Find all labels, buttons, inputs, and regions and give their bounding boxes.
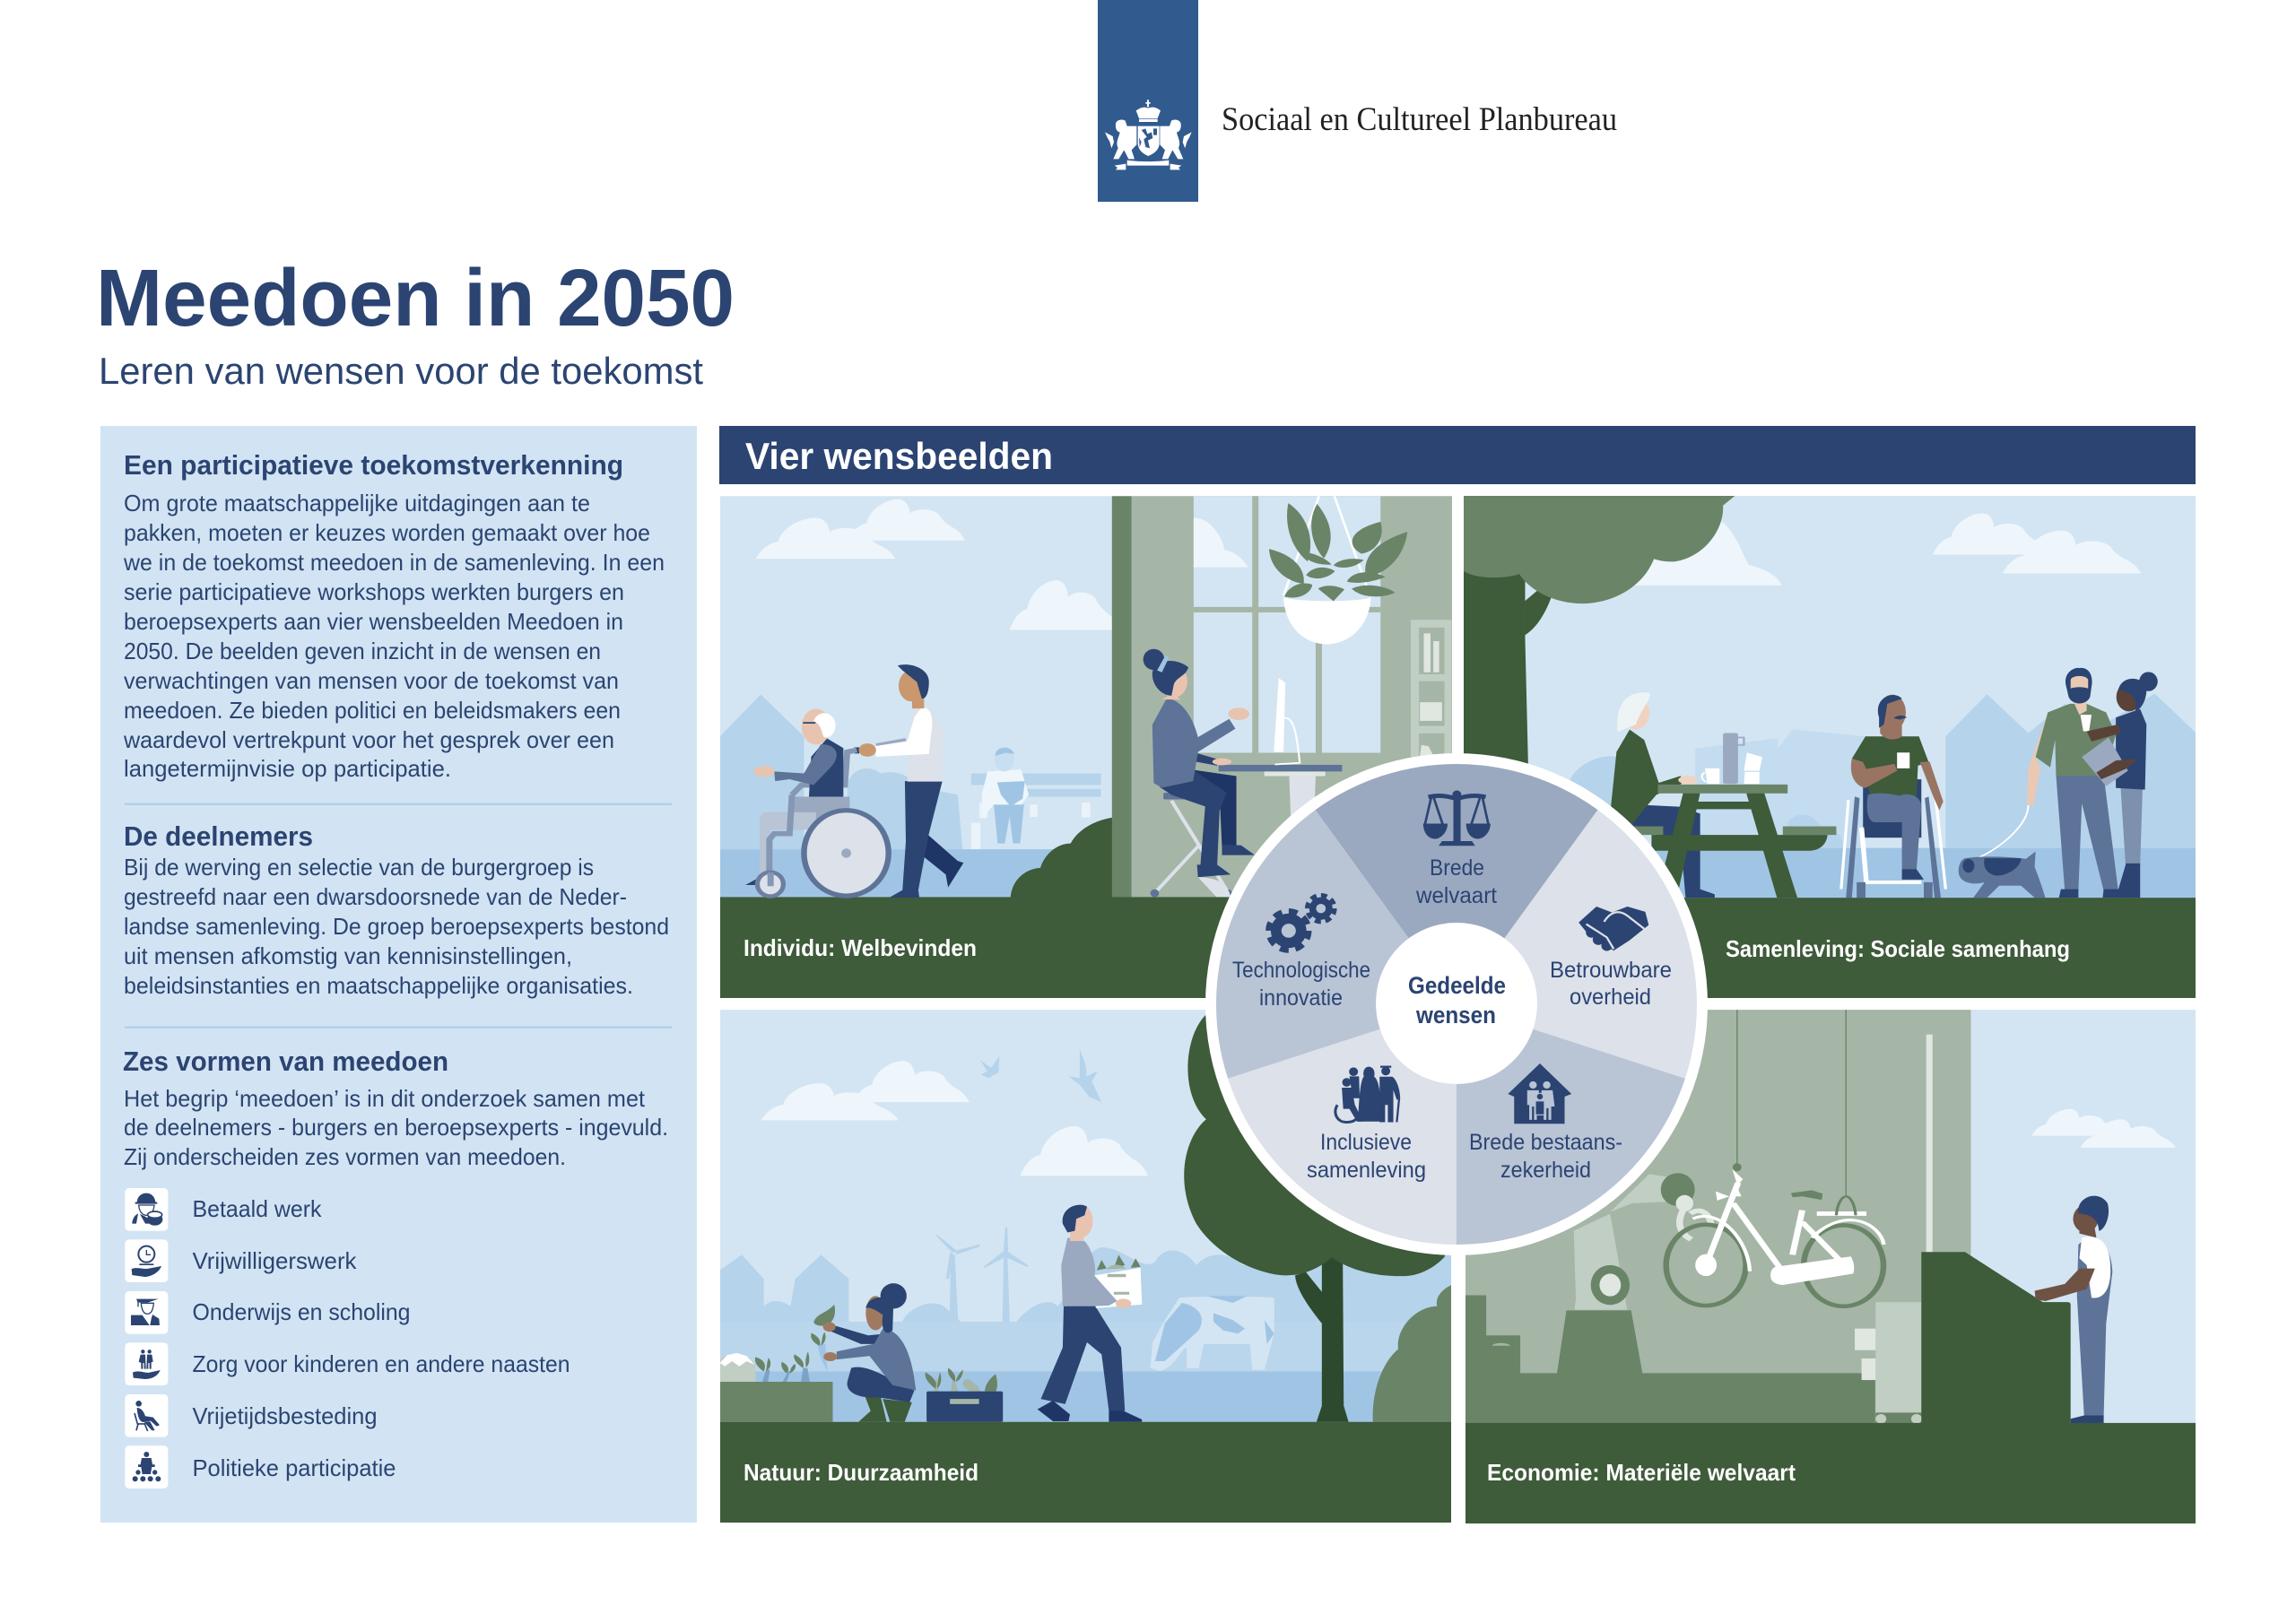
section: zes vormen van meedoen	[123, 1046, 668, 1170]
tree	[1184, 1015, 1446, 1422]
title: Meedoen in 2050	[96, 254, 735, 343]
heading bar: vier wensbeelden: Vier wensbeelden	[745, 435, 1053, 477]
icon: handshake	[1578, 907, 1648, 951]
wheel centre label: wensen	[1415, 1002, 1496, 1028]
panel: individu welbevinden	[718, 496, 1454, 1002]
wind turbines	[935, 1228, 1029, 1322]
section: participatieve toekomstverkenning: meedoen. Ze bieden politici en beleidsmakers een	[124, 697, 621, 724]
icon: house with family	[1508, 1063, 1571, 1124]
dog with leash	[1959, 805, 2046, 898]
section: participatieve toekomstverkenning: Om grote maatschappelijke uitdagingen aan te	[124, 490, 590, 516]
text: brede bestaanszekerheid: zekerheid	[1500, 1158, 1591, 1183]
ground	[718, 1422, 1454, 1525]
section: de deelnemers: uit mensen afkomstig van kennisinstellingen,	[124, 942, 572, 969]
icon: onderwijs en scholing	[125, 1291, 168, 1334]
label: Vrijetijdsbesteding	[192, 1402, 377, 1429]
woman at picnic table	[1610, 692, 1715, 898]
panel: natuur duurzaamheid	[718, 1004, 1476, 1525]
subtitle: Leren van wensen voor de toekomst	[99, 350, 703, 392]
text: technologische innovatie: innovatie	[1259, 985, 1343, 1011]
icon: zorg voor naasten	[125, 1342, 168, 1385]
man in wheelchair	[1841, 695, 1945, 898]
icon: betaald werk	[125, 1188, 168, 1231]
section: de deelnemers: beleidsinstanties en maatschappelijke organisaties.	[124, 972, 633, 999]
text: inclusieve samenleving: Inclusieve	[1320, 1130, 1412, 1155]
ground	[1684, 898, 2196, 998]
label: Politieke participatie	[192, 1454, 396, 1481]
picnic table	[1632, 733, 1836, 898]
text: technologische innovatie: Technologische	[1232, 958, 1370, 983]
section: participatieve toekomstverkenning: waardevol vertrekpunt voor het gesprek over een	[123, 726, 614, 753]
woman at desk	[1144, 649, 1342, 898]
building	[1112, 496, 1454, 898]
section: zes vormen van meedoen: Zes vormen van meedoen	[123, 1046, 448, 1077]
bush	[1373, 1284, 1454, 1422]
section: participatieve toekomstverkenning: langetermijnvisie op participatie.	[124, 755, 451, 782]
ground	[720, 897, 1230, 998]
bench with person	[971, 748, 1100, 849]
section: de deelnemers: De deelnemers	[124, 820, 313, 852]
caregiver and wheelchair	[745, 664, 963, 898]
section: participatieve toekomstverkenning: beroepsexperts aan vier wensbeelden Meedoen in	[124, 608, 623, 635]
cow	[1150, 1296, 1274, 1371]
section: de deelnemers: landse samenleving. De groep beroepsexperts bestond	[124, 913, 669, 940]
text: inclusieve samenleving: samenleving	[1307, 1158, 1426, 1183]
bicycle	[1666, 1163, 1884, 1306]
walking man with bag	[1038, 1204, 1142, 1422]
panel: samenleving sociale samenhang	[1462, 494, 2198, 1004]
section: participatieve toekomstverkenning: serie participatieve workshops werkten burgers en	[124, 578, 624, 605]
icon: vrijwilligerswerk	[125, 1239, 168, 1282]
control console	[1921, 1252, 2071, 1424]
icon: gears	[1268, 895, 1335, 950]
section: participatieve toekomstverkenning: we in de toekomst meedoen in de samenleving. In een	[123, 549, 665, 576]
conveyor and cabinet	[1465, 1296, 1922, 1424]
label: individu: Individu: Welbevinden	[744, 934, 977, 961]
panel: economie materiele welvaart	[1462, 1010, 2199, 1526]
text: brede bestaanszekerheid: Brede bestaans-	[1469, 1130, 1622, 1155]
text: betrouwbare overheid	[1550, 958, 1672, 1010]
wheel centre label: Gedeelde	[1408, 972, 1506, 999]
section: zes vormen van meedoen: de deelnemers - burgers en beroepsexperts - ingevuld.	[124, 1114, 668, 1141]
label: economie: Economie: Materiële welvaart	[1487, 1459, 1796, 1486]
illustration: individu scene	[718, 496, 1454, 1002]
illustration: natuur scene	[718, 1004, 1476, 1525]
icon: vrijetijdsbesteding	[125, 1394, 168, 1437]
ground	[1462, 1423, 2198, 1526]
text: technologische innovatie	[1232, 958, 1370, 1011]
section: zes vormen van meedoen: Het begrip ‘meedoen’ is in dit onderzoek samen met	[124, 1085, 646, 1112]
illustration: economie scene	[1462, 1010, 2199, 1526]
icon: politieke participatie	[125, 1445, 168, 1488]
illustration: samenleving scene	[1462, 494, 2198, 1004]
robot arm	[1557, 1173, 1711, 1375]
icon: scales	[1423, 790, 1491, 846]
section: participatieve toekomstverkenning	[123, 449, 665, 782]
worker	[2035, 1196, 2112, 1424]
section: de deelnemers	[124, 820, 669, 999]
text: betrouwbare overheid: Betrouwbare	[1550, 958, 1672, 983]
section: participatieve toekomstverkenning: pakken, moeten er keuzes worden gemaakt over hoe	[124, 519, 650, 546]
heading bar: vier wensbeelden	[719, 426, 2196, 484]
text: brede bestaanszekerheid	[1469, 1130, 1622, 1183]
section: zes vormen van meedoen: Zij onderscheiden zes vormen van meedoen.	[124, 1143, 566, 1170]
raised bed	[718, 1351, 832, 1422]
section: de deelnemers: Bij de werving en selectie van de burgergroep is	[124, 854, 594, 881]
label: Onderwijs en scholing	[192, 1298, 411, 1325]
gardening woman	[811, 1283, 916, 1422]
section: participatieve toekomstverkenning: Een participatieve toekomstverkenning	[124, 449, 623, 481]
section: participatieve toekomstverkenning: 2050. De beelden geven inzicht in de wensen en	[124, 638, 601, 664]
text: brede welvaart	[1415, 855, 1497, 908]
hanging plant	[1269, 496, 1407, 645]
text: betrouwbare overheid: overheid	[1570, 985, 1651, 1010]
section: de deelnemers: gestreefd naar een dwarsdoorsnede van de Neder-	[124, 883, 627, 910]
vegetable crate	[926, 1368, 1003, 1422]
label: samenleving: Samenleving: Sociale samenhang	[1726, 935, 2070, 962]
label: Zorg voor kinderen en andere naasten	[192, 1350, 570, 1377]
standing couple	[2027, 668, 2158, 898]
wordmark: Sociaal en Cultureel Planbureau	[1222, 101, 1617, 138]
text: brede welvaart: Brede	[1430, 855, 1484, 881]
chart: gedeelde wensen wheel	[1205, 753, 1708, 1255]
birds	[980, 1050, 1101, 1102]
text: inclusieve samenleving	[1307, 1130, 1426, 1183]
logo: Rijksoverheid ribbon with crest	[1098, 0, 1617, 202]
icon: crest	[1105, 100, 1192, 169]
panel: left sidebar	[100, 426, 697, 1523]
label: Vrijwilligerswerk	[192, 1247, 357, 1274]
label: natuur: Natuur: Duurzaamheid	[744, 1459, 978, 1486]
tree	[1462, 494, 1736, 779]
text: brede welvaart: welvaart	[1415, 883, 1497, 908]
icon: diverse people	[1335, 1066, 1400, 1123]
label: Betaald werk	[192, 1195, 322, 1222]
wheel centre label	[1408, 972, 1506, 1028]
section: participatieve toekomstverkenning: verwachtingen van mensen voor de toekomst van	[124, 667, 619, 694]
